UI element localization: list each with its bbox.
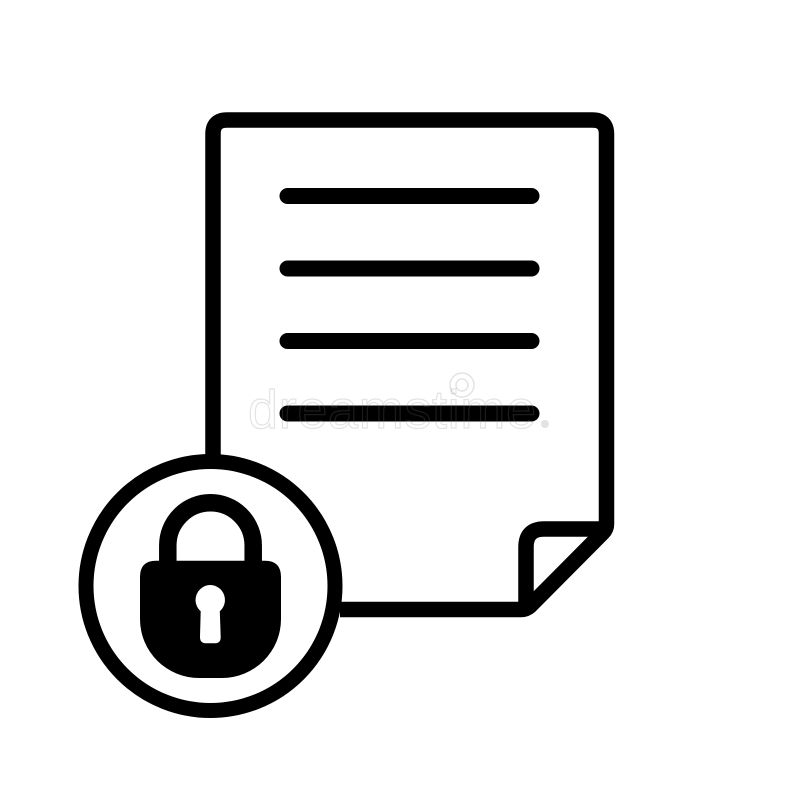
padlock shackle — [168, 503, 253, 565]
watermark: dreamstime — [248, 380, 536, 440]
text lines — [288, 196, 532, 414]
padlock icon — [140, 503, 281, 678]
padlock body — [140, 561, 281, 678]
folded corner — [526, 529, 606, 610]
document page outline — [213, 120, 606, 610]
lock badge circle — [86, 462, 335, 710]
